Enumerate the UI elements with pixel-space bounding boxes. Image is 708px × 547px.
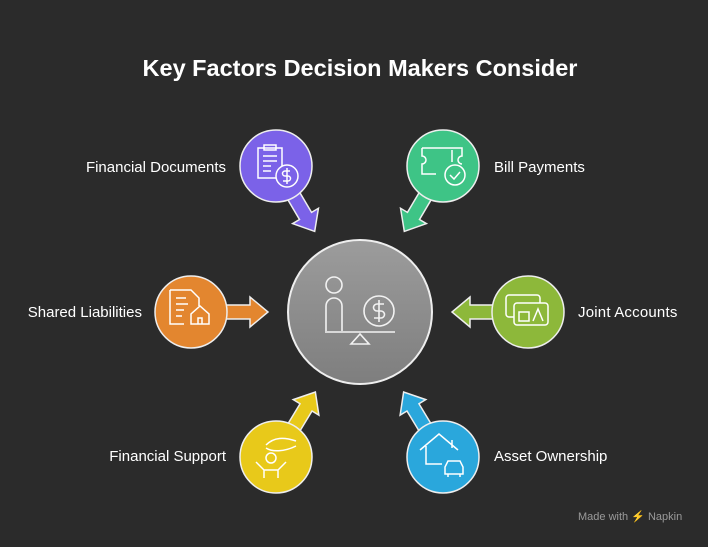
label: Shared Liabilities: Shared Liabilities	[28, 304, 142, 321]
center circle	[288, 240, 432, 384]
label: Bill Payments: Bill Payments	[494, 159, 585, 176]
label: Asset Ownership: Asset Ownership	[494, 448, 607, 465]
title: Key Factors Decision Makers Consider	[143, 55, 577, 81]
node: Financial Documents	[240, 130, 328, 239]
node: Asset Ownership	[391, 384, 479, 493]
node: Financial Support	[240, 384, 328, 493]
label: Joint Accounts: Joint Accounts	[578, 304, 678, 321]
node: Bill Payments	[391, 130, 479, 239]
label: Financial Support: Financial Support	[109, 448, 227, 465]
label: Financial Documents: Financial Documents	[86, 159, 226, 176]
node: Shared Liabilities	[155, 276, 268, 348]
footer: Made with ⚡ Napkin	[578, 510, 682, 523]
node: Joint Accounts	[452, 276, 564, 348]
